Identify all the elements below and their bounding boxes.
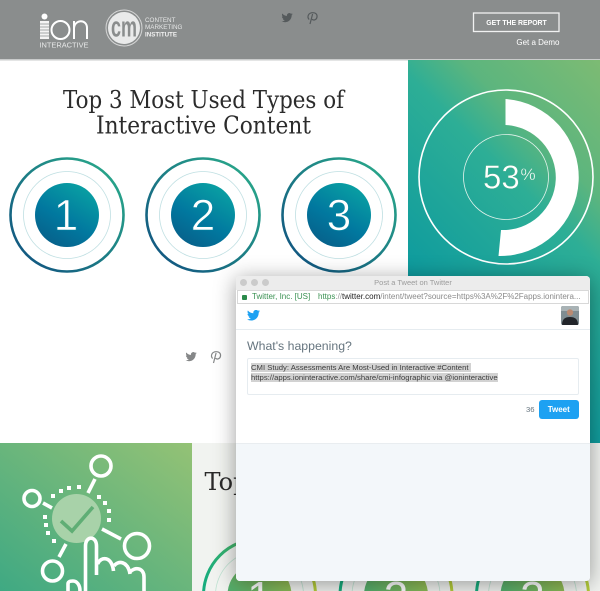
twitter header row: [236, 303, 590, 330]
logo: content marketing institute: INSTITUTE: [145, 32, 177, 38]
tweet button: [538, 400, 579, 419]
panel: bottom right: [192, 443, 600, 591]
window title bar: Post a Tweet on Twitter: [374, 278, 452, 287]
window title bar: [236, 276, 590, 290]
logo: content marketing institute: CONTENT: [145, 17, 176, 24]
bottom number badge 2: [340, 539, 452, 591]
tweet button: Tweet: [548, 405, 570, 414]
tweet popup window: [236, 276, 590, 581]
logo: content marketing institute: [106, 10, 183, 46]
title: Top 3 Most Used Types of: [63, 86, 346, 114]
address bar: Twitter, Inc. [US]: [252, 292, 310, 301]
icon: pinterest share: [211, 352, 221, 363]
panel: 53 percent stat: %: [520, 165, 536, 184]
number badge 2: [146, 158, 260, 272]
tweet text box: CMI Study: Assessments Are Most-Used in Interactive #Content: [251, 363, 468, 372]
icon: twitter share: [186, 352, 197, 361]
number badge 1: 1: [54, 191, 78, 240]
icon: twitter header: [282, 13, 293, 22]
number badge 1: [10, 158, 124, 272]
stat value: 53: [483, 158, 520, 196]
button: get the report: GET THE REPORT: [486, 20, 548, 27]
logo: ion interactive: [40, 14, 88, 50]
button: get the report: [474, 13, 559, 32]
title: Interactive Content: [96, 112, 311, 140]
window empty footer: [236, 443, 590, 581]
heading: second section: Top: [204, 468, 248, 496]
link: get a demo: Get a Demo: [516, 38, 560, 47]
icon: pinterest header: [308, 13, 317, 24]
logo: content marketing institute: cm: [111, 12, 137, 44]
bottom number badge 1: [204, 539, 316, 591]
tweet text box: [247, 358, 579, 395]
number badge 3: 3: [327, 191, 351, 240]
number badge 2: 2: [191, 191, 215, 240]
number badge 3: [282, 158, 396, 272]
title: [63, 86, 346, 140]
icon: twitter bird: [247, 310, 260, 320]
donut arc: [498, 99, 579, 256]
prompt heading: What's happening?: [247, 339, 352, 353]
character count: 36: [526, 405, 535, 414]
avatar: [561, 306, 579, 325]
logo: content marketing institute: MARKETING: [145, 24, 183, 31]
logo: ion interactive: INTERACTIVE: [40, 40, 88, 50]
panel: bottom green with icon: [0, 443, 192, 591]
tweet text box: https://apps.ioninteractive.com/share/cmi-infographic via @ioninteractive: [251, 373, 498, 382]
panel: 53 percent stat: [408, 60, 600, 443]
bottom number badge 3: [476, 539, 588, 591]
address bar: https://twitter.com/intent/tweet?source=https%3A%2F%2Fapps.ionintera...: [318, 292, 581, 301]
icon: check in network with pointing hand: [24, 456, 150, 591]
header bar: [0, 0, 600, 60]
address bar: [237, 290, 589, 304]
